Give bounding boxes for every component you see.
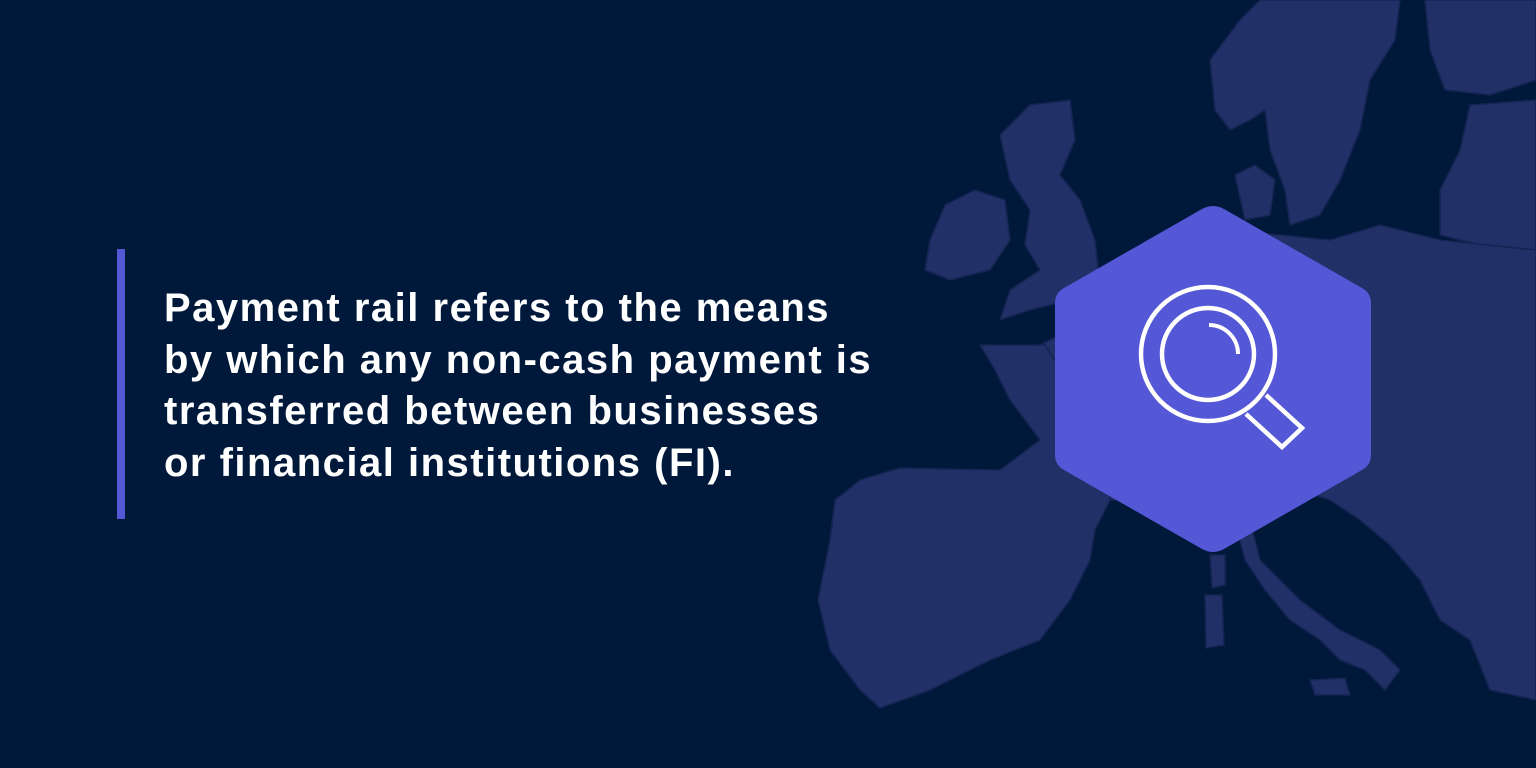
scandinavia: [1210, 0, 1400, 225]
main text block: transferred between businesses: [164, 389, 820, 433]
baltics: [1440, 100, 1536, 250]
france and iberia: [818, 345, 1110, 708]
denmark: [1235, 165, 1275, 220]
central and eastern europe: [1040, 225, 1536, 700]
main text block: by which any non-cash payment is: [164, 338, 872, 382]
corsica: [1210, 555, 1225, 588]
main text block: or financial institutions (FI).: [164, 440, 735, 484]
main text block: [164, 286, 872, 484]
great britain: [1000, 100, 1100, 320]
sicily: [1310, 678, 1350, 695]
main text block: Payment rail refers to the means: [164, 286, 830, 330]
ireland: [925, 190, 1010, 280]
accent bar: [117, 249, 125, 519]
sardinia: [1205, 595, 1224, 648]
finland: [1425, 0, 1536, 95]
